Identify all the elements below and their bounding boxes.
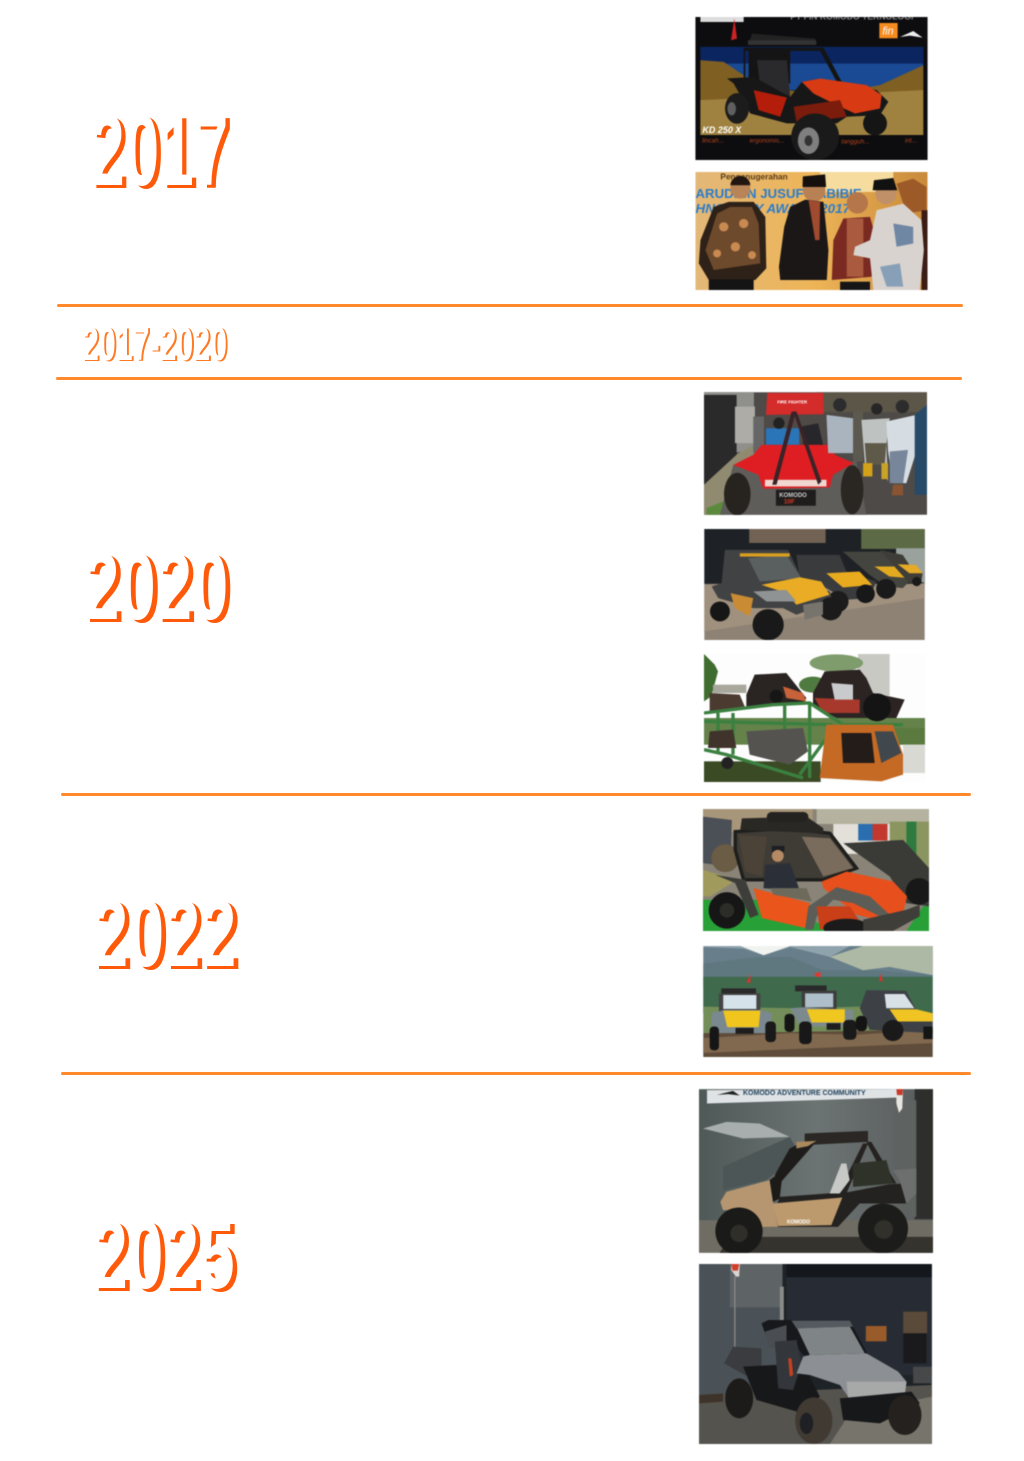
heading: year 2017: 2017 (90, 95, 228, 207)
red buggy body: 10F (784, 499, 795, 506)
photo: tan KD buggy side view (698, 1088, 934, 1254)
front yellow buggy (710, 550, 842, 640)
left yellow buggy (710, 988, 776, 1050)
divider (61, 1072, 971, 1075)
tan buggy (715, 1131, 916, 1255)
fire fighter roof: FIRE FIGHTER (777, 400, 808, 405)
banner (707, 1089, 898, 1104)
photo: KD 250 X poster (694, 16, 928, 161)
right yellow buggy (856, 990, 933, 1041)
heading: year 2020: 2020 (83, 533, 228, 640)
photo: technology award ceremony: HNOLOGY AWARD 2017 (695, 202, 851, 216)
tan buggy: KOMODO (787, 1220, 810, 1226)
red buggy body (733, 412, 854, 506)
fire fighter roof (766, 393, 824, 415)
heading: year 2022: 2022 (92, 880, 236, 987)
heading: 2017-2020: 2017-2020 (82, 317, 227, 370)
heading: year 2025: 2025 (92, 1200, 234, 1309)
person in red batik (832, 192, 877, 290)
photo: technology award ceremony (694, 171, 928, 291)
green truck frame (704, 703, 903, 778)
driver (763, 846, 812, 901)
red buggy body: KOMODO (779, 493, 807, 499)
photo: KD 250 X poster: lincah... (702, 137, 724, 144)
person in dark suit (779, 174, 828, 280)
photo: KD 250 X poster: ergonomis... (750, 137, 784, 144)
orange truck cab (820, 725, 903, 781)
divider (61, 793, 971, 796)
grey buggy (724, 1320, 922, 1444)
photo: buggies on transport truck (703, 654, 926, 783)
firefighters in white suits (826, 398, 927, 495)
photo: KD 250 X poster: KD 250 X (702, 125, 742, 135)
photo: orange buggy at expo (702, 808, 930, 932)
photo: yellow buggy fleet (703, 528, 926, 641)
person in white batik (853, 178, 924, 290)
buggies on upper deck (710, 670, 905, 721)
photo: KD 250 X poster: tangguh... (841, 139, 869, 146)
divider and sub-heading band: 2017-2020 (57, 304, 963, 307)
banner: KOMODO ADVENTURE COMMUNITY (743, 1090, 866, 1097)
photo: grey buggy in workshop (698, 1263, 933, 1445)
photo: KD 250 X poster: fin (882, 25, 894, 37)
photo: KD 250 X poster: irit... (905, 138, 917, 145)
middle yellow buggy (785, 985, 856, 1044)
orange buggy (709, 812, 920, 937)
person left in batik (699, 176, 766, 290)
photo: three yellow buggies in the mountains (702, 945, 934, 1058)
rear buggies (796, 550, 923, 612)
photo: technology award ceremony: ARUDDIN JUSUF HABIBIE (695, 187, 862, 201)
photo: red fire fighter buggy (703, 391, 928, 516)
